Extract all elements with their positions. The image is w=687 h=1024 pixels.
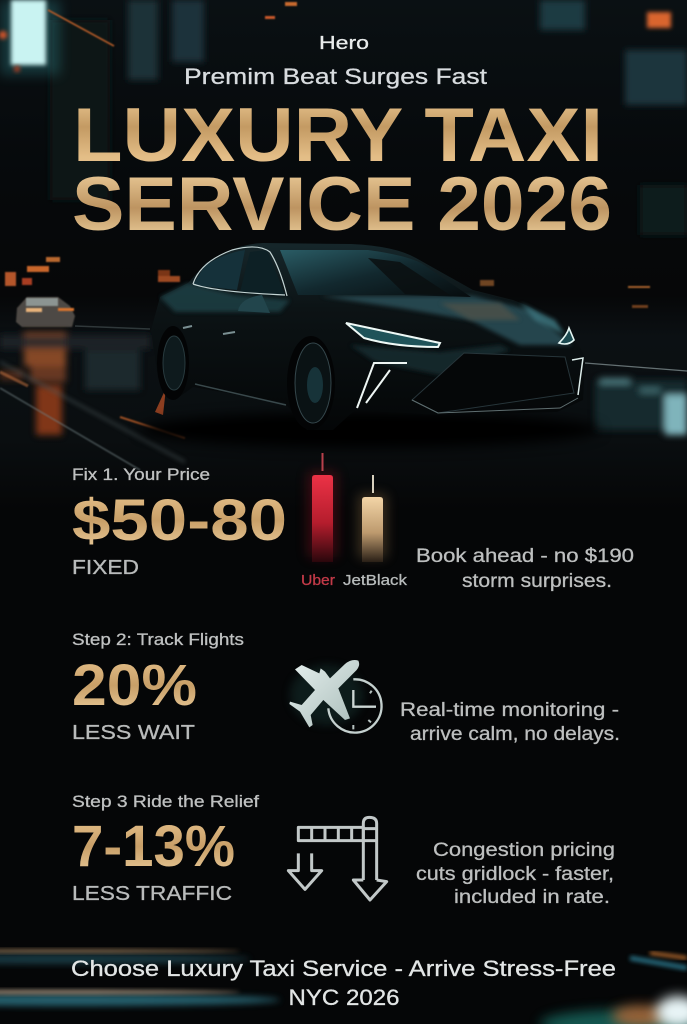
car body [151, 243, 585, 430]
step 3 value: 7-13% [72, 814, 235, 879]
step 2 heading: Step 2: Track Flights [72, 631, 244, 649]
headlight right [559, 328, 574, 344]
JetBlack candle [358, 475, 387, 562]
distant car [16, 297, 75, 327]
step 1 value: $50-80 [72, 488, 287, 553]
door handles [183, 326, 235, 334]
wet road [0, 326, 687, 470]
JetBlack label: JetBlack [343, 572, 408, 589]
footer call to action [71, 956, 616, 1010]
step 2 description: arrive calm, no delays. [410, 724, 620, 745]
candle chart: Uber vs JetBlack [301, 453, 408, 589]
windshield [280, 250, 471, 297]
step 1 description: storm surprises. [462, 571, 612, 592]
step 2 description [400, 700, 620, 745]
footer call to action: Choose Luxury Taxi Service - Arrive Stress-Free [71, 956, 616, 981]
step 3 description: Congestion pricing [433, 840, 615, 861]
title [72, 93, 612, 247]
mirror [238, 295, 270, 313]
side windows [193, 250, 245, 290]
step 3 description [416, 840, 615, 908]
icon: plane and clock [289, 660, 382, 733]
step 2 value: 20% [72, 653, 197, 718]
icon: toll gate and down arrows [288, 817, 387, 900]
step 2 description: Real-time monitoring - [400, 700, 619, 721]
title line 2: SERVICE 2026 [72, 162, 612, 247]
distant lights [5, 257, 650, 308]
footer light streaks [0, 949, 687, 1024]
title line 1: LUXURY TAXI [73, 93, 603, 178]
step 3 description: cuts gridlock - faster, [416, 864, 614, 885]
hood reflection [320, 296, 572, 345]
step 1 label: FIXED [72, 557, 139, 579]
step 3 heading: Step 3 Ride the Relief [72, 793, 259, 811]
background: rainy city street [0, 0, 687, 510]
subtitle: Premim Beat Surges Fast [184, 64, 487, 89]
step 3 label: LESS TRAFFIC [72, 883, 232, 905]
fog light trim right [572, 358, 583, 395]
fog light trim left [357, 363, 407, 408]
section: step 1 [72, 453, 634, 592]
step 3 description: included in rate. [454, 887, 610, 908]
car shadow [140, 412, 600, 448]
Uber label: Uber [301, 572, 335, 589]
section: step 2 [72, 631, 620, 745]
step 2 label: LESS WAIT [72, 722, 195, 744]
step 1 description: Book ahead - no $190 [416, 546, 634, 567]
step 1 description [416, 546, 634, 592]
footer call to action: NYC 2026 [288, 985, 400, 1010]
headlight left [346, 323, 440, 347]
neon sign glow [0, 0, 671, 75]
step 1 heading: Fix 1. Your Price [72, 466, 210, 484]
sill [195, 384, 286, 405]
section: step 3 [72, 793, 615, 908]
car [140, 243, 600, 448]
wheel: rear [157, 326, 189, 400]
Uber candle [308, 453, 337, 562]
hero label: Hero [319, 32, 369, 53]
grille [412, 353, 574, 413]
wheel: front [287, 336, 335, 430]
chrome window line [193, 247, 287, 296]
